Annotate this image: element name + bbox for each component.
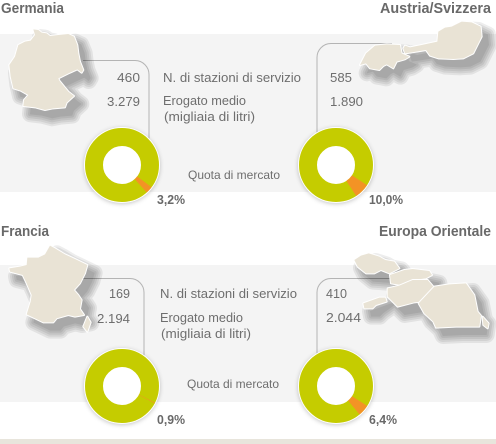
donut chart: Germania 3,2% — [83, 126, 161, 204]
labels: upper row: (migliaia di litri) — [164, 109, 255, 124]
values: Austria/Svizzera: 585 — [330, 70, 352, 85]
footer band — [0, 439, 496, 444]
percentage: Francia: 0,9% — [157, 412, 185, 427]
percentage: Germania: 3,2% — [157, 192, 185, 207]
heading: Austria/Svizzera: Austria/Svizzera — [380, 1, 492, 17]
labels: lower row — [160, 286, 297, 391]
values: Austria/Svizzera — [330, 70, 363, 109]
labels: lower row: Quota di mercato — [187, 377, 279, 391]
map: Francia — [9, 246, 94, 332]
values: Germania: 460 — [117, 70, 140, 85]
panel: upper background band — [0, 34, 496, 192]
connector: Francia — [82, 278, 144, 356]
map: Austria/Svizzera — [360, 22, 489, 78]
connector: Germania — [83, 60, 149, 140]
values: Germania — [107, 70, 140, 109]
values: Germania: 3.279 — [107, 94, 140, 109]
donut chart: Francia 0,9% — [84, 348, 160, 424]
map: Europa Orientale — [354, 253, 489, 336]
labels: lower row: (migliaia di litri) — [161, 326, 251, 341]
donut chart: Austria/Svizzera 10,0% — [297, 126, 375, 204]
labels: upper row: Quota di mercato — [188, 168, 280, 182]
panel: lower background band — [0, 265, 496, 402]
labels: lower row: N. di stazioni di servizio — [160, 286, 297, 301]
labels: upper row: N. di stazioni di servizio — [163, 70, 301, 85]
values: Europa Orientale — [326, 286, 361, 325]
values: Europa Orientale: 2.044 — [326, 310, 361, 325]
labels: upper row: Erogato medio — [163, 93, 246, 108]
connector: Austria/Svizzera — [317, 44, 392, 135]
heading: Europa Orientale: Europa Orientale — [379, 224, 491, 240]
values: Francia — [97, 286, 130, 326]
percentage: Europa Orientale: 6,4% — [369, 412, 397, 427]
donut chart: Europa Orientale 6,4% — [297, 347, 375, 425]
labels: lower row: Erogato medio — [160, 310, 243, 325]
map: Germania — [9, 29, 90, 118]
percentage: Austria/Svizzera: 10,0% — [369, 192, 403, 207]
values: Francia: 169 — [109, 286, 130, 301]
values: Francia: 2.194 — [97, 311, 130, 326]
values: Europa Orientale: 410 — [326, 286, 347, 301]
heading: Germania: Germania — [1, 1, 65, 17]
connector: Europa Orientale — [317, 278, 390, 356]
heading: Francia: Francia — [1, 224, 50, 240]
labels: upper row — [163, 70, 301, 182]
values: Austria/Svizzera: 1.890 — [330, 94, 363, 109]
